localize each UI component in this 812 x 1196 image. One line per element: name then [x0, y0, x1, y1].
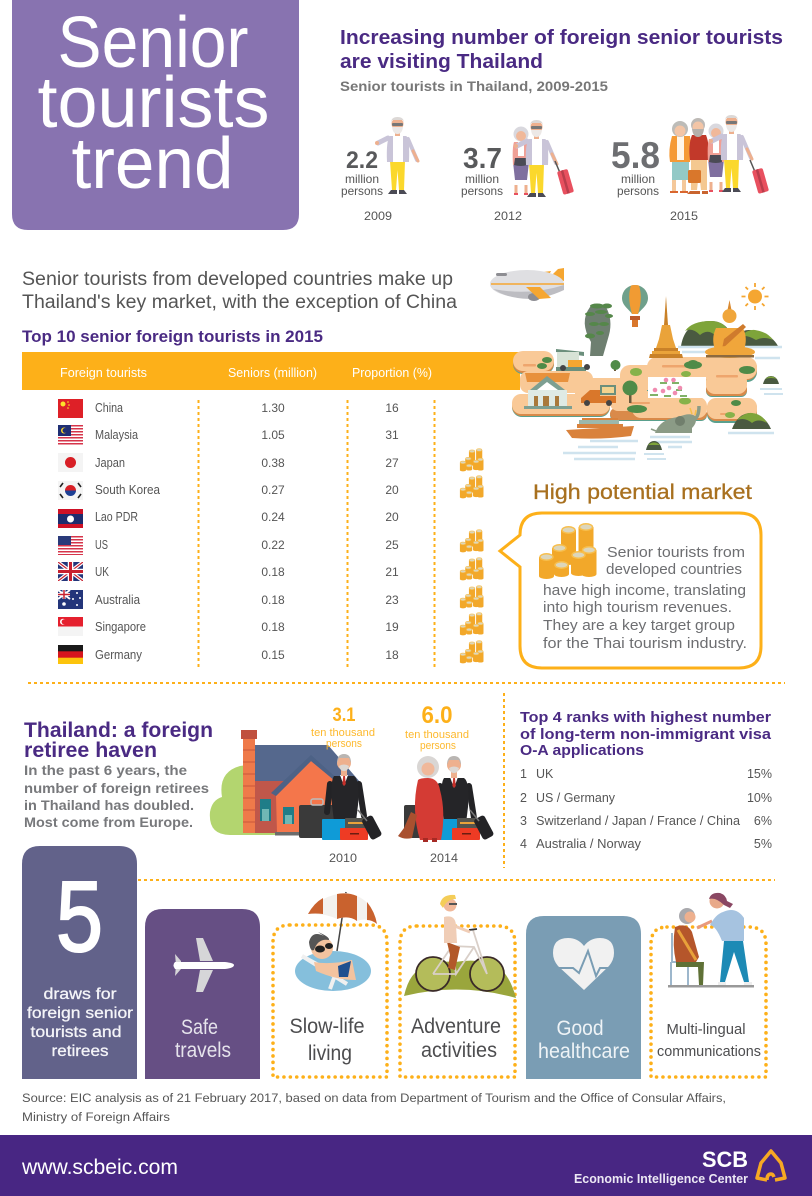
title: tourists — [38, 63, 270, 143]
ranking rows: 1 — [520, 767, 527, 781]
panel: 5 draws: foreign senior — [27, 1005, 133, 1022]
stat: 2012: million — [465, 172, 499, 186]
stat: retirees 2010: 2010 — [329, 851, 357, 865]
panel: 5 draws — [22, 846, 137, 1079]
ranking rows: 10% — [747, 791, 772, 805]
heading: increasing number of senior tourists: Senior tourists in Thailand, 2009-2015 — [340, 78, 608, 94]
callout text: into high tourism revenues. — [543, 599, 732, 616]
ranking rows: Switzerland / Japan / France / China — [536, 814, 740, 828]
stat: retirees 2014 — [405, 702, 469, 865]
seniors column: 0.24 — [261, 510, 285, 524]
row labels: Australia — [95, 592, 141, 607]
stat: 2015: 2015 — [670, 209, 698, 223]
icon: hills — [678, 321, 782, 358]
panel: safe travels: travels — [175, 1039, 231, 1062]
stat: 2012: 3.7 — [463, 143, 502, 175]
heading: top 10: Top 10 senior foreign tourists in 2015 — [22, 327, 323, 346]
table header: Seniors (million) — [228, 365, 317, 380]
proportion column: 25 — [385, 538, 399, 552]
icon: house — [241, 730, 360, 836]
title: Senior — [58, 3, 248, 83]
row labels: Japan — [95, 455, 125, 470]
panel: adventure activities: Adventure — [411, 1015, 501, 1038]
icon: coin stacks — [539, 524, 596, 579]
heading: of long-term non-immigrant visa — [520, 727, 772, 743]
heading — [24, 719, 213, 762]
panel: slow-life living: Slow-life — [290, 1015, 364, 1038]
panel: 5 draws: retirees — [52, 1043, 109, 1060]
stat: 2012 — [461, 120, 574, 223]
callout text: for the Thai tourism industry. — [543, 635, 747, 652]
table header: Foreign tourists — [60, 365, 147, 380]
seniors column: 0.18 — [261, 565, 285, 579]
icon: nurse helping senior — [668, 893, 754, 988]
flags — [58, 399, 83, 664]
heading: retiree haven — [24, 739, 157, 762]
icon: group of seniors with suitcase — [669, 115, 769, 194]
stat: 2012: persons — [461, 184, 503, 198]
icon: bush — [210, 766, 275, 835]
ranking rows: 5% — [754, 837, 772, 851]
panel: safe travels — [145, 909, 260, 1079]
panel: 5 draws: 5 — [56, 861, 103, 973]
ranking rows: US / Germany — [536, 791, 616, 805]
text block: retiree haven — [24, 719, 213, 830]
row labels: Malaysia — [95, 427, 139, 442]
icon: senior couple with suitcase — [513, 120, 574, 197]
heading: increasing number of senior tourists — [340, 27, 783, 94]
icon: luggage and senior man — [299, 754, 382, 841]
icon: truck — [581, 385, 616, 406]
icon: boat — [563, 418, 638, 459]
proportion column: 20 — [385, 483, 399, 497]
source note — [22, 1091, 726, 1124]
table header: Proportion (%) — [352, 365, 432, 380]
seniors column: 0.22 — [261, 538, 285, 552]
stat: 2015: million — [621, 172, 655, 186]
proportion column: 18 — [385, 648, 399, 662]
heading: increasing number of senior tourists: are visiting Thailand — [340, 51, 543, 73]
heading: increasing number of senior tourists: Increasing number of foreign senior tourists — [340, 27, 783, 49]
proportion column: 20 — [385, 510, 399, 524]
panel: adventure activities: activities — [421, 1039, 497, 1062]
panel: multi-lingual communications — [651, 893, 766, 1077]
callout text — [543, 544, 747, 652]
panel: safe travels: Safe — [181, 1016, 218, 1039]
footer band: SCB — [702, 1147, 748, 1172]
icon: elephant — [650, 406, 699, 447]
icon: temple — [524, 373, 572, 409]
icon: airplane — [174, 938, 234, 992]
stat: retirees 2010: 3.1 — [332, 705, 356, 726]
callout text: Senior tourists from — [607, 544, 745, 561]
proportion column: 23 — [385, 593, 399, 607]
heading: O-A applications — [520, 743, 644, 759]
callout text: They are a key target group — [543, 617, 735, 634]
panel: good healthcare — [526, 916, 641, 1079]
stat: 2015 — [611, 115, 769, 223]
illustration: Thailand map — [490, 268, 783, 459]
ranking: visa O-A applications — [520, 710, 772, 851]
icon: sun — [742, 283, 768, 310]
row labels: South Korea — [95, 482, 161, 497]
description: in Thailand has doubled. — [24, 798, 194, 813]
stat: 2012: 2012 — [494, 209, 522, 223]
ranking rows: 4 — [520, 837, 527, 851]
text block: key market intro: Senior tourists from developed countries make up — [22, 269, 453, 290]
panel: multi-lingual communications: Multi-lingual — [666, 1022, 746, 1038]
stat: 2009: 2.2 — [346, 147, 378, 174]
icon: buddha — [705, 300, 755, 358]
stat: retirees 2010 — [311, 705, 375, 865]
seniors column: 0.38 — [261, 456, 285, 470]
icon: lotus pond — [648, 377, 706, 398]
heading: high potential market: High potential market — [533, 481, 752, 504]
ranking rows: 6% — [754, 814, 772, 828]
row labels — [95, 400, 161, 662]
proportion column — [385, 401, 399, 662]
ranking rows: UK — [536, 767, 554, 781]
seniors column — [261, 401, 285, 662]
footer band — [0, 1135, 812, 1196]
icon: man sunbathing — [295, 892, 377, 991]
seniors column: 0.15 — [261, 648, 285, 662]
heading — [520, 710, 772, 759]
proportion column: 31 — [385, 428, 399, 442]
panel: good healthcare: Good — [556, 1017, 604, 1040]
footer band: Economic Intelligence Center — [574, 1172, 748, 1186]
table header — [22, 352, 520, 390]
panel: slow-life living — [273, 892, 387, 1077]
map islands — [512, 351, 757, 423]
title: trend — [72, 124, 234, 204]
stat: 2009: 2009 — [364, 209, 392, 223]
illustration: house and retiree 2010 — [210, 730, 382, 841]
title — [38, 3, 270, 204]
table: top 10 senior foreign tourists — [22, 352, 520, 669]
icon: tuk-tuk — [556, 349, 590, 371]
panel: 5 draws: draws for — [44, 986, 116, 1003]
ranking rows — [520, 767, 772, 851]
illustration: couple with luggage 2014 — [398, 756, 494, 842]
icon: pagoda — [649, 296, 683, 358]
callout text: have high income, translating — [543, 582, 746, 599]
icon: SCB logo — [757, 1151, 785, 1180]
icon: senior man — [375, 117, 418, 194]
stat: 2009 — [341, 117, 418, 223]
stat: 2009: million — [345, 172, 379, 186]
description: In the past 6 years, the — [24, 763, 188, 778]
ranking rows: 2 — [520, 791, 527, 805]
panel: good healthcare: healthcare — [538, 1040, 630, 1063]
icon: heart with pulse — [553, 938, 614, 990]
proportion column: 27 — [385, 456, 399, 470]
seniors column: 0.18 — [261, 620, 285, 634]
icon: senior cyclist — [404, 895, 516, 998]
callout text: developed countries — [606, 561, 742, 578]
stat: 2009: persons — [341, 184, 383, 198]
heading: Thailand: a foreign — [24, 719, 213, 742]
text block: key market intro — [22, 269, 457, 313]
footer band: www.scbeic.com — [21, 1156, 178, 1179]
panel: multi-lingual communications: communications — [657, 1044, 761, 1060]
icons: high-income coins — [460, 449, 483, 663]
proportion column: 21 — [385, 565, 399, 579]
proportion column: 19 — [385, 620, 399, 634]
heading: Top 4 ranks with highest number — [520, 710, 771, 726]
ranking rows: 3 — [520, 814, 527, 828]
row labels: Lao PDR — [95, 509, 138, 524]
panel: 5 draws: tourists and — [30, 1024, 122, 1041]
ranking rows: 15% — [747, 767, 772, 781]
row labels: US — [95, 537, 108, 552]
icon: tree — [610, 360, 638, 403]
panel: title — [12, 0, 299, 230]
seniors column: 1.05 — [261, 428, 285, 442]
row labels: Singapore — [95, 619, 146, 634]
stat: retirees 2014: ten thousand — [405, 729, 469, 741]
seniors column: 0.27 — [261, 483, 285, 497]
stat: retirees 2014: 2014 — [430, 851, 458, 865]
seniors column: 0.18 — [261, 593, 285, 607]
panel: adventure activities — [400, 895, 516, 1077]
stat: retirees 2010: persons — [326, 738, 362, 750]
proportion column: 16 — [385, 401, 399, 415]
stat: retirees 2010: ten thousand — [311, 727, 375, 739]
seniors column: 1.30 — [261, 401, 285, 415]
stat: retirees 2014: 6.0 — [422, 702, 452, 729]
stat: 2015: persons — [617, 184, 659, 198]
row labels: UK — [95, 564, 109, 579]
description: number of foreign retirees — [24, 781, 209, 796]
icon: limestone rock — [585, 304, 613, 356]
row labels: China — [95, 400, 124, 415]
source note: Ministry of Foreign Affairs — [22, 1110, 170, 1124]
stat: 2015: 5.8 — [611, 135, 660, 176]
text block: key market intro: Thailand's key market, with the exception of China — [22, 292, 457, 313]
source note: Source: EIC analysis as of 21 February 2017, based on data from Department of Tourism and the Office of Consular Affairs, — [22, 1091, 726, 1105]
callout: high income — [500, 513, 761, 668]
description: Most come from Europe. — [24, 815, 193, 830]
icon: hot air balloon — [622, 285, 648, 327]
stat: retirees 2014: persons — [420, 740, 456, 752]
row labels: Germany — [95, 647, 142, 662]
ranking rows: Australia / Norway — [536, 837, 642, 851]
icon: small islets — [644, 376, 783, 459]
description — [24, 763, 209, 830]
icon: airplane — [490, 268, 564, 301]
panel: slow-life living: living — [308, 1042, 352, 1065]
